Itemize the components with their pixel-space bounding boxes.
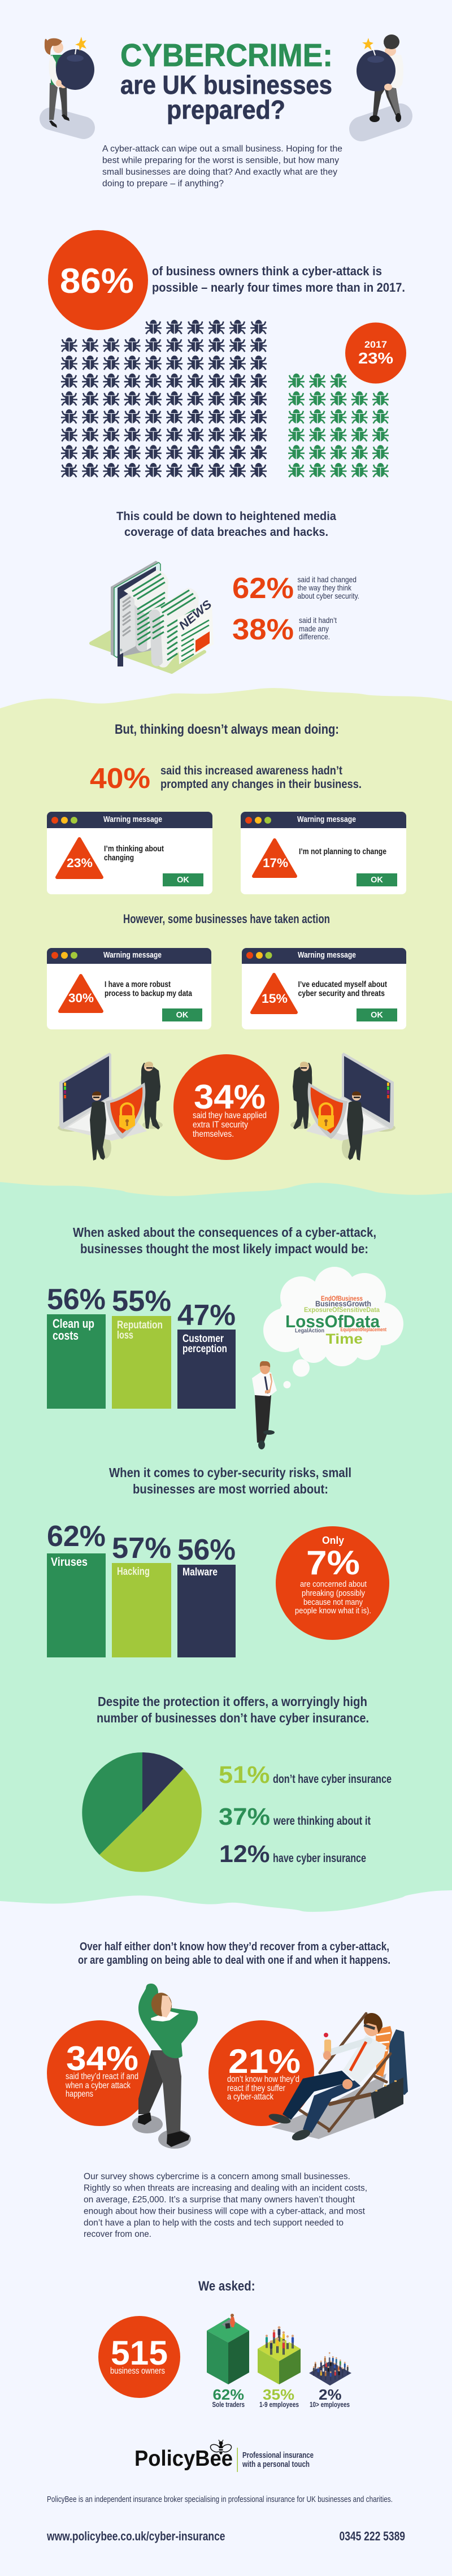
bar: clean up costs 56%: costs [53, 1328, 79, 1343]
icon grid: green bugs [288, 374, 389, 477]
warning dialog: 30%: I have a more robust [105, 980, 171, 989]
column: sole traders [207, 2314, 249, 2409]
warning dialog: 17% [241, 812, 406, 894]
heading: We asked: [198, 2279, 255, 2294]
stat circle: 2017 23%: 23% [358, 349, 393, 367]
heading: Despite the protection it offers, a worryingly high [98, 1694, 367, 1709]
logo: PolicyBee: with a personal touch [242, 2460, 310, 2469]
stat circle: only 7% [276, 1526, 389, 1640]
section background: lime [0, 688, 452, 1244]
illustration: laptop, shield and guards, left [58, 1053, 163, 1161]
body text [84, 2172, 367, 2239]
legend: 37%: 37% [219, 1803, 270, 1830]
heading: When asked about the consequences of a cyber-attack, [73, 1225, 376, 1240]
bar: viruses 62% [47, 1520, 106, 1657]
stat circle: 34% applied extra security: extra IT security [193, 1120, 248, 1129]
heading: Over half either don’t know how they’d recover from a cyber-attack, [80, 1941, 389, 1953]
bar: reputation loss 55%: Reputation [117, 1319, 163, 1331]
bar: customer perception 47%: perception [182, 1343, 227, 1355]
legend: 37% [219, 1803, 371, 1830]
heading [78, 1941, 390, 1967]
column label: 62% [212, 2386, 244, 2403]
heading [73, 1225, 376, 1256]
newspaper masthead: NEWS [176, 598, 214, 633]
column: 1-9 employees [258, 2326, 301, 2409]
legend: 12%: 12% [219, 1841, 270, 1868]
warning dialog: 17%: OK [371, 876, 383, 885]
warning dialog: 15%: 15% [262, 992, 288, 1006]
warning dialog: 30%: 30% [68, 991, 94, 1005]
warning dialog: 15%: I’ve educated myself about [298, 980, 387, 989]
heading: When it comes to cyber-security risks, small [109, 1465, 351, 1480]
warning dialog: 15% [242, 948, 406, 1029]
stat: 62%: about cyber security. [297, 591, 359, 600]
stat description: of business owners think a cyber-attack is [152, 264, 382, 278]
legend: 51%: 51% [219, 1761, 270, 1789]
icon grid: 86 navy bugs [61, 320, 267, 477]
stat circle: only 7%: phreaking (possibly [302, 1588, 365, 1598]
legend: 12% [219, 1841, 366, 1868]
bar: customer perception 47%: Customer [182, 1332, 224, 1345]
illustration: man in deck chair [268, 2013, 408, 2142]
stat description: possible – nearly four times more than in 2017. [152, 280, 405, 295]
warning dialog: 17%: I’m not planning to change [299, 847, 386, 856]
heading [97, 1694, 369, 1725]
stat circle: 515 business owners [98, 2316, 180, 2398]
subtitle line 2: prepared? [167, 95, 285, 124]
panel: we asked [98, 2279, 351, 2409]
panel: thinking doesn't mean doing [47, 722, 406, 1161]
stat circle: only 7%: because not many [303, 1597, 363, 1607]
stat circle: 21% don't know: a cyber-attack [227, 2092, 274, 2102]
panel: cyber risks [47, 1465, 389, 1657]
illustration: woman holding bomb [45, 37, 94, 128]
icon: bee [209, 2440, 233, 2454]
heading: businesses thought the most likely impact would be: [80, 1241, 368, 1256]
stat circle: 34% react: when a cyber attack [65, 2081, 131, 2090]
stat circle: 21% don't know: 21% [228, 2042, 301, 2080]
website: www.policybee.co.uk/cyber-insurance [46, 2529, 225, 2543]
warning dialog: 30% [47, 948, 211, 1029]
heading: or are gambling on being able to deal with one if and when it happens. [78, 1954, 390, 1967]
stat circle: 34% applied extra security: 34% [194, 1078, 266, 1116]
bar: hacking 57%: Hacking [117, 1565, 150, 1578]
bar: hacking 57% [112, 1532, 171, 1657]
column: 1-9 employees: 1-9 employees [259, 2400, 299, 2409]
heading: This could be down to heightened media [116, 509, 337, 523]
stat: 62%: said it had changed [297, 575, 357, 584]
thought cloud with word cloud: EquipmentReplacement [340, 1327, 386, 1332]
warning dialog: 15%: cyber security and threats [298, 989, 385, 998]
stat circle: only 7%: are concerned about [300, 1579, 367, 1589]
bar: clean up costs 56%: Clean up [53, 1317, 94, 1331]
column: 10+ employees [309, 2352, 351, 2409]
bar: malware 56%: 56% [177, 1534, 236, 1566]
warning dialog: 23%: 23% [67, 856, 93, 870]
stat: 40%: prompted any changes in their business. [160, 778, 362, 791]
panel: cyber insurance [82, 1694, 392, 1872]
title: CYBERCRIME: [120, 37, 333, 73]
stat: 38%: 38% [232, 613, 294, 646]
bar: malware 56% [177, 1534, 236, 1657]
stat circle: 21% don't know: don’t know how they’d [227, 2075, 299, 2084]
heading: But, thinking doesn’t always mean doing: [115, 722, 339, 737]
stat: 40% [90, 762, 362, 794]
bar: hacking 57%: 57% [112, 1532, 171, 1565]
warning dialog: 15%: Warning message [298, 950, 356, 960]
bar: customer perception 47% [177, 1299, 236, 1409]
illustration: thinking man [252, 1361, 277, 1449]
stat circle: 21% don't know [208, 2020, 314, 2126]
stat circle: 34% applied extra security [173, 1054, 279, 1160]
stat: 40%: said this increased awareness hadn’t [160, 764, 342, 777]
legend: 37%: were thinking about it [273, 1815, 371, 1828]
stat circle: 2017 23%: 2017 [364, 339, 387, 350]
thought cloud with word cloud: EndOfBusiness [321, 1295, 363, 1302]
thought cloud with word cloud: LegalAction [295, 1328, 324, 1334]
panel: recovery [47, 1941, 408, 2239]
phone number: 0345 222 5389 [339, 2529, 405, 2543]
panel: media coverage [91, 509, 359, 672]
illustration: laptop, shield and guards, right [290, 1053, 395, 1161]
subtitle line 1: are UK businesses [120, 70, 332, 99]
intro text: doing to prepare – if anything? [102, 179, 224, 189]
legend: 12%: have cyber insurance [273, 1852, 366, 1865]
body text: Our survey shows cybercrime is a concern among small businesses. [84, 2172, 350, 2181]
stat circle: 86% [48, 230, 148, 330]
panel: consequences [47, 1225, 403, 1449]
bar: customer perception 47%: 47% [177, 1299, 236, 1332]
intro text: A cyber-attack can wipe out a small business. Hoping for the [102, 144, 342, 154]
stat circle: 34% applied extra security: said they have applied [193, 1111, 267, 1120]
heading [116, 509, 337, 539]
illustration: stressed man [132, 1984, 198, 2149]
stat: 62%: 62% [232, 572, 294, 605]
warning dialog: 30%: Warning message [103, 950, 162, 960]
stat: 38%: made any [299, 624, 329, 633]
body text: Rightly so when threats are increasing and dealing with an incident costs, [84, 2183, 367, 2193]
stat: 38% [232, 613, 337, 646]
stat: 62% [232, 572, 359, 605]
bar: clean up costs 56%: 56% [47, 1283, 106, 1316]
warning dialog: 23% [47, 812, 212, 894]
column label: 2% [319, 2386, 341, 2403]
column: 10+ employees: 10> employees [310, 2400, 350, 2409]
logo: PolicyBee: PolicyBee [134, 2447, 233, 2471]
stat circle: only 7%: 7% [306, 1544, 360, 1582]
heading [109, 1465, 351, 1496]
stat circle: 34% react [47, 2020, 153, 2126]
body text: on average, £25,000. It’s a surprise that many owners haven’t thought [84, 2195, 355, 2205]
intro text: small businesses are doing that? And exactly what are they [102, 167, 337, 177]
stat: 38%: said it hadn’t [299, 616, 337, 625]
intro text: best while preparing for the worst is sensible, but how many [102, 156, 339, 165]
stat: 40%: 40% [90, 762, 150, 794]
stat circle: only 7%: people know what it is). [295, 1606, 371, 1616]
legend: 51% [219, 1761, 392, 1789]
heading: coverage of data breaches and hacks. [124, 525, 328, 539]
warning dialog: 23%: Warning message [103, 815, 162, 824]
stat circle: 34% react: 34% [66, 2040, 138, 2077]
bar: reputation loss 55%: 55% [112, 1285, 171, 1318]
thought cloud with word cloud: BusinessGrowth [315, 1300, 371, 1308]
stat circle: 515 business owners: 515 [111, 2334, 168, 2372]
column label: 35% [263, 2386, 294, 2403]
stat: 62%: the way they think [297, 583, 352, 592]
warning dialog: 23%: I’m thinking about [104, 845, 164, 854]
warning dialog: 30%: process to backup my data [105, 989, 193, 998]
logo: PolicyBee [134, 2440, 314, 2472]
warning dialog: 30%: OK [176, 1011, 189, 1020]
stat circle: 21% don't know: react if they suffer [227, 2084, 286, 2093]
bar: viruses 62%: 62% [47, 1520, 106, 1553]
illustration: tablet and newspaper [91, 561, 214, 672]
heading: businesses are most worried about: [133, 1482, 328, 1496]
intro text [102, 144, 342, 189]
body text: don’t have a plan to help with the costs and tech support needed to [84, 2218, 344, 2228]
warning dialog: 23%: OK [177, 876, 189, 885]
body text: recover from one. [84, 2229, 151, 2239]
bar: reputation loss 55%: loss [117, 1329, 133, 1341]
pie chart [82, 1752, 202, 1872]
bar: clean up costs 56% [47, 1283, 106, 1409]
body text: enough about how their business will cope with a cyber-attack, and most [84, 2207, 366, 2216]
stat circle: 2017 23% [345, 322, 406, 383]
heading: number of businesses don’t have cyber insurance. [97, 1711, 369, 1725]
legend: 51%: don’t have cyber insurance [273, 1773, 392, 1786]
heading: taken action: However, some businesses have taken action [123, 912, 330, 926]
warning dialog: 17%: 17% [263, 856, 288, 870]
stat description [152, 264, 405, 295]
thought cloud with word cloud [263, 1267, 403, 1388]
panel: footer [46, 2440, 405, 2543]
illustration: man holding bomb [357, 34, 403, 129]
bar: malware 56%: Malware [182, 1566, 218, 1578]
panel: header [45, 34, 403, 189]
thought cloud with word cloud: LossOfData [285, 1311, 380, 1331]
stat circle: only 7%: Only [322, 1535, 344, 1546]
thought cloud with word cloud: Time [325, 1331, 363, 1347]
bar: viruses 62%: Viruses [51, 1555, 88, 1569]
thought cloud with word cloud: ExposureOfSensitiveData [304, 1306, 380, 1314]
warning dialog: 23%: changing [104, 854, 134, 863]
logo: PolicyBee: Professional insurance [242, 2451, 314, 2460]
warning dialog: 17%: Warning message [297, 815, 356, 824]
stat: 38%: difference. [299, 632, 330, 641]
stat circle: 34% react: said they’d react if and [66, 2072, 138, 2081]
section background: pale blue footer [0, 1890, 452, 2576]
bar: reputation loss 55% [112, 1285, 171, 1409]
warning dialog: 15%: OK [371, 1011, 383, 1020]
panel: 86 percent stat [48, 230, 406, 477]
stat circle: 86%: 86% [60, 262, 134, 301]
stat circle: 34% applied extra security: themselves. [193, 1129, 234, 1139]
column: sole traders: Sole traders [212, 2400, 245, 2409]
stat circle: 515 business owners: business owners [110, 2366, 165, 2376]
section background: mint [0, 1182, 452, 1922]
stat circle: 34% react: happens [66, 2089, 93, 2099]
